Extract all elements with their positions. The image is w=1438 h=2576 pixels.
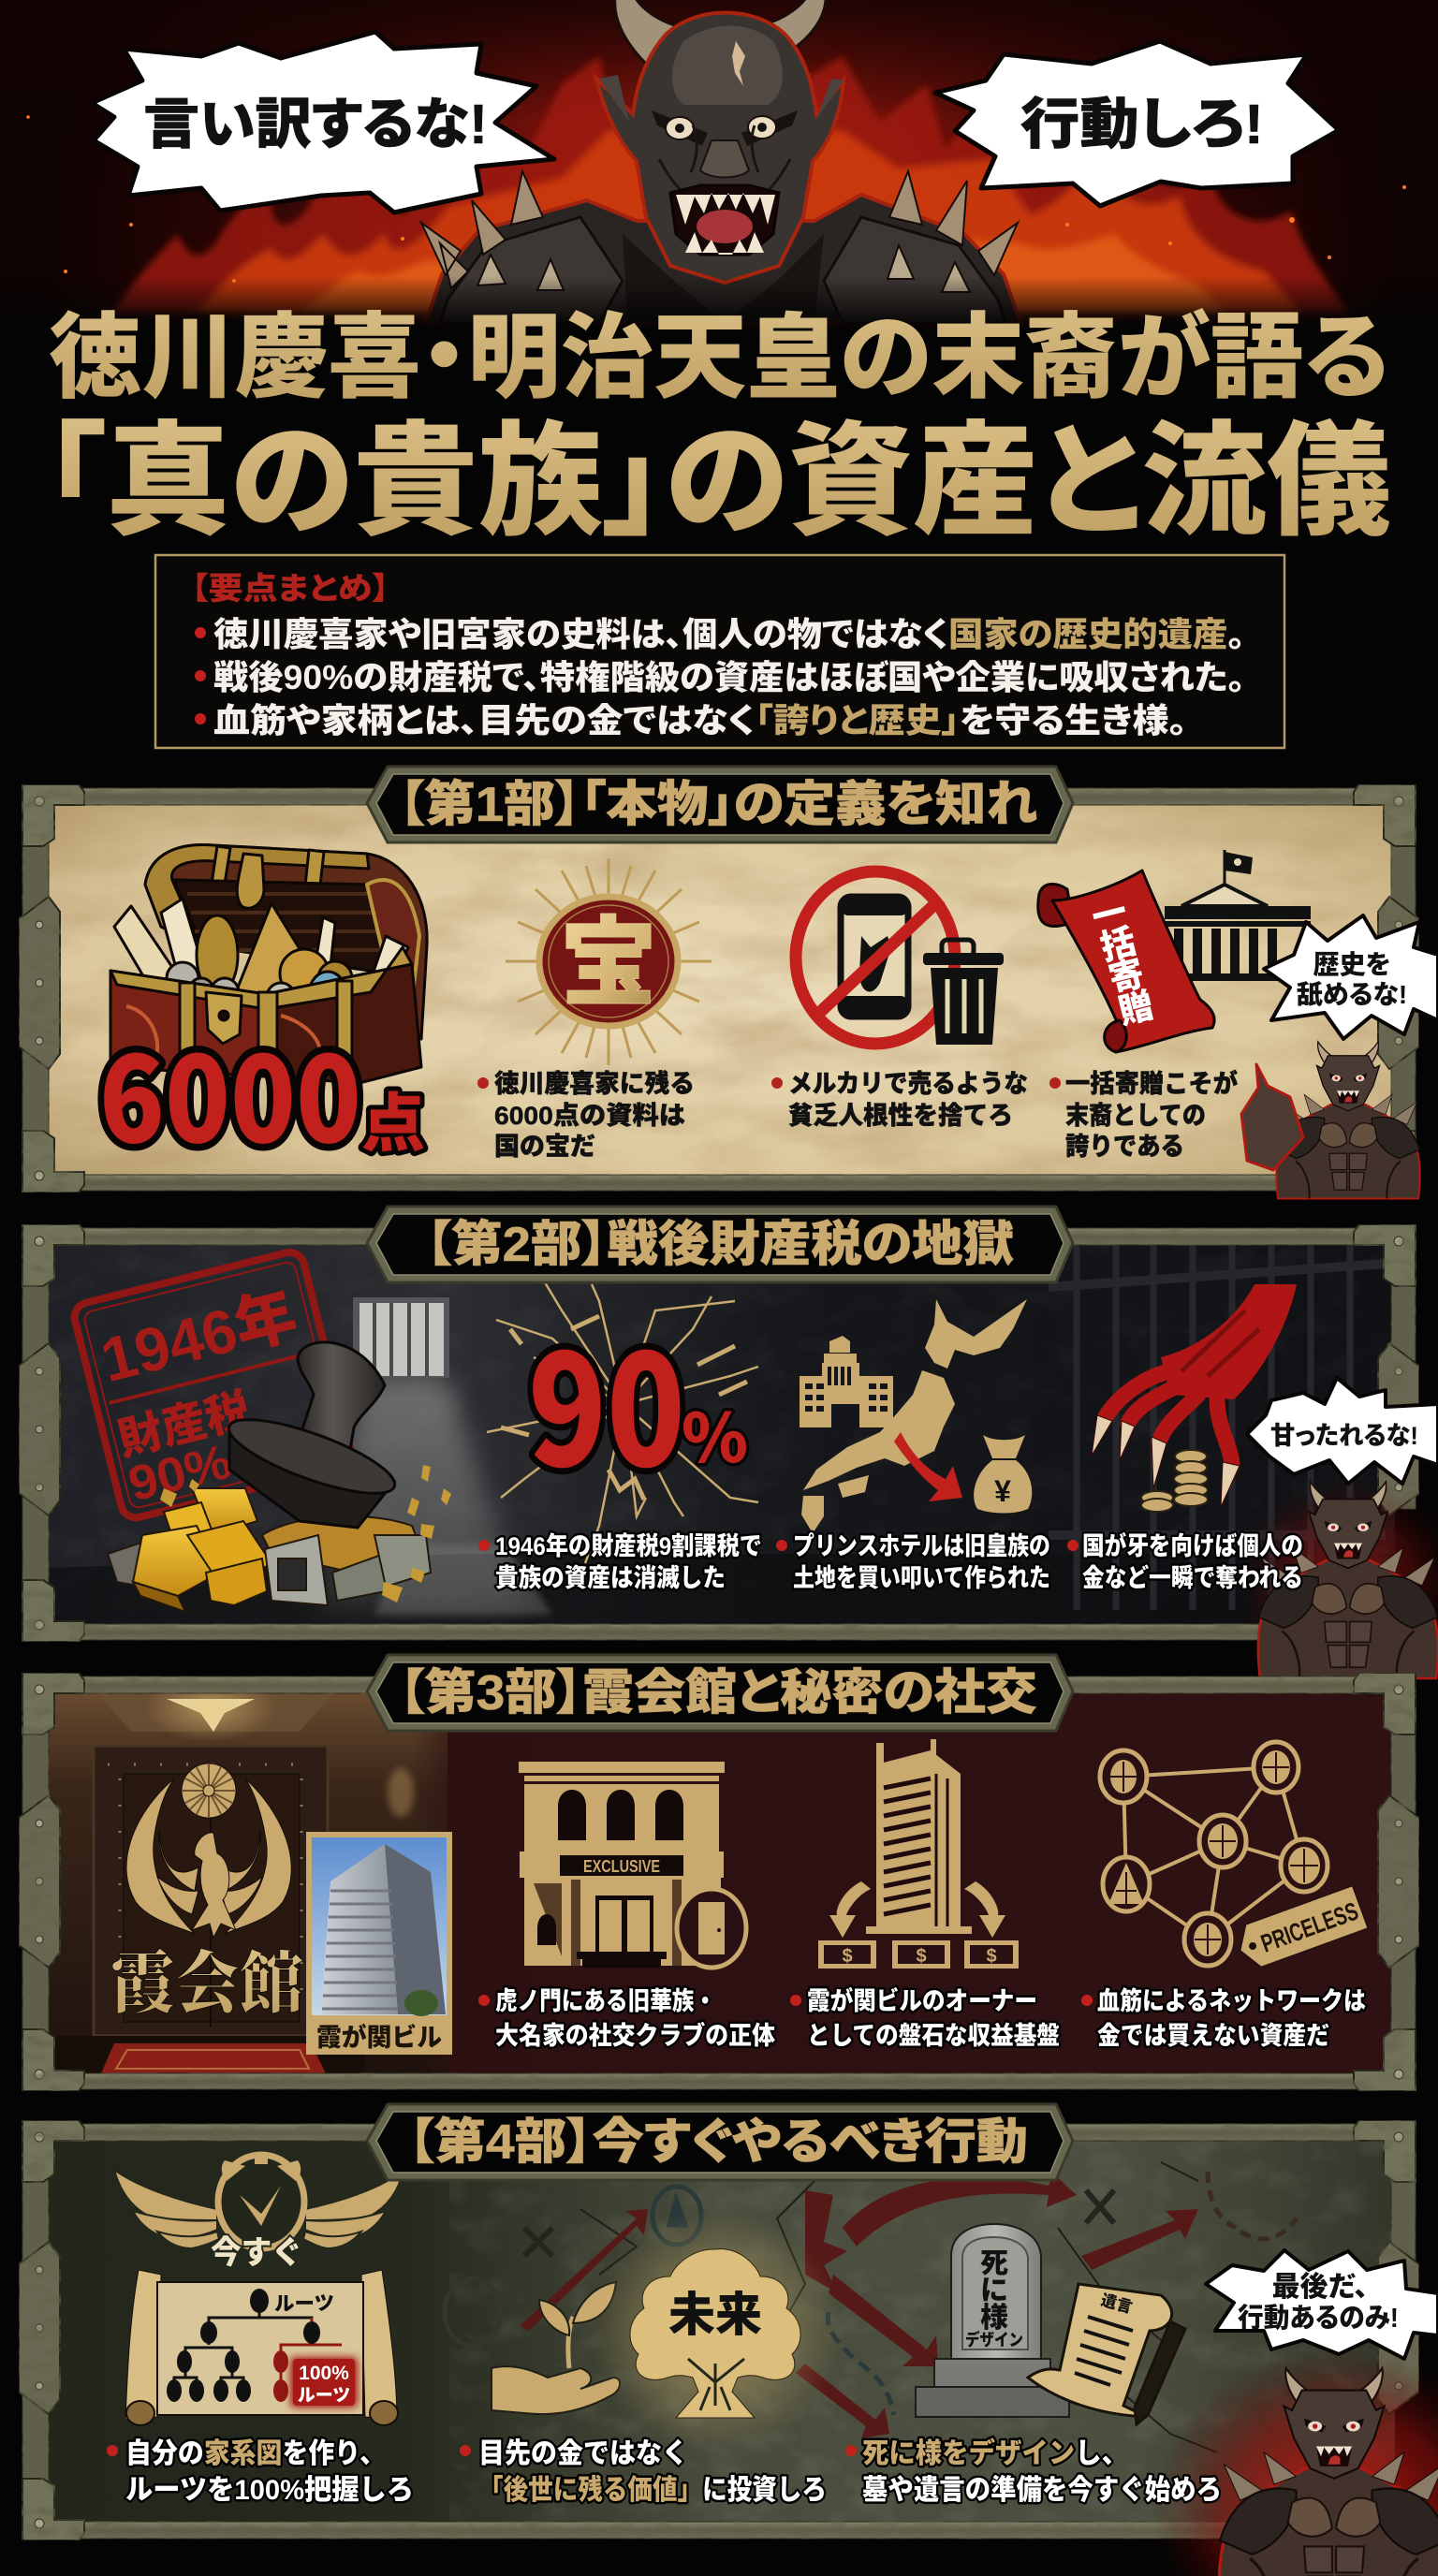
arrow: land to money: [894, 1432, 962, 1501]
maroon background: [45, 1690, 1395, 2075]
banner part 4: [367, 2104, 1073, 2180]
speech bubble right: 行動しろ!: [935, 41, 1339, 206]
wings: [114, 2170, 404, 2248]
icon: treasure medallion: [506, 858, 712, 1065]
prohibition sign: [796, 871, 955, 1044]
family tree: [167, 2289, 342, 2402]
panel: part 1: [19, 767, 1438, 1198]
tax stamp mark: 90%: [124, 1434, 236, 1512]
icon: red scroll 一括寄贈: 寄: [1105, 954, 1148, 1000]
icon: gravestone: デザイン: [965, 2330, 1023, 2349]
caption 1: 6000点の資料は: [494, 1102, 685, 1130]
speech bubble: 歴史を舐めるな: [1264, 915, 1438, 1039]
icon: will document: 遺言: [1099, 2291, 1135, 2317]
oni armor and shoulders: [421, 171, 1020, 323]
title: 徳川慶喜・明治天皇の末裔が語る: [49, 305, 1389, 409]
caption 3: [845, 2437, 1222, 2506]
prison background: [45, 1241, 1395, 1627]
photo: Kasumigaseki Building: [306, 1832, 452, 2055]
banner part 4: 【第4部】今すぐやるべき行動: [408, 2115, 1028, 2170]
speech bubble: 甘ったれるな: 甘ったれるな!: [1270, 1422, 1418, 1450]
caption 3: [1067, 1531, 1303, 1592]
oni mini part 4: [1152, 2349, 1438, 2576]
icon: office tower: $: [916, 1946, 927, 1967]
6000点: 6000: [99, 1006, 361, 1177]
icon: state building: [1165, 850, 1311, 981]
photo: Kasumigaseki Building: 霞が関ビル: [316, 2023, 442, 2052]
olive map background: [45, 2137, 1395, 2525]
icon: hotel building: [800, 1336, 893, 1427]
caption 3: 墓や遺言の準備を今すぐ始めろ: [862, 2475, 1222, 2506]
icon: exclusive club: [519, 1762, 746, 1968]
icon: will document: [1028, 2284, 1185, 2424]
banner part 1: 【第1部】「本物」の定義を知れ: [399, 778, 1037, 832]
door hall: [45, 1675, 477, 2075]
caption 3: 死に様をデザインし、: [862, 2437, 1128, 2469]
banner part 3: 【第3部】霞会館と秘密の社交: [399, 1666, 1037, 1720]
speech bubble left: 言い訳するな!: 言い訳するな!: [143, 94, 488, 155]
speech bubble: 行動あるのみ: 最後だ、: [1272, 2272, 1368, 2303]
speech bubble: 行動あるのみ: [1206, 2250, 1438, 2359]
jail bars: [1049, 1245, 1386, 1610]
fade to black under the title: [0, 276, 1438, 328]
speech bubble: 行動あるのみ: 行動あるのみ!: [1238, 2303, 1399, 2334]
caption 1: [478, 1987, 775, 2050]
100% roots badge: 100%: [299, 2363, 349, 2384]
stone frame: [19, 1673, 1419, 2091]
chest treasures: [114, 899, 408, 1017]
big 90 percent with cracks: 90: [528, 1289, 685, 1511]
trash can: [923, 940, 1004, 1045]
100% roots badge: ルーツ: [298, 2386, 350, 2406]
summary line 3: 血筋や家柄とは、目先の金ではなく 「誇りと歴史」 を守る生き様。: [213, 701, 1187, 739]
stone frame: [19, 784, 1419, 1193]
caption 3: 誇りである: [1065, 1133, 1184, 1161]
oni mini part 1: [1241, 1042, 1420, 1198]
tax stamp mark: [71, 1250, 354, 1521]
icon: family crest network: [1100, 1742, 1328, 1966]
stone frame: [19, 2120, 1419, 2540]
caption 3: [1049, 1069, 1238, 1161]
panel: part 3: [19, 1655, 1419, 2091]
icon: exclusive club: EXCLUSIVE: [583, 1857, 660, 1876]
caption 2: [460, 2438, 827, 2506]
icon: gravestone: に: [980, 2276, 1008, 2306]
caption 2: [776, 1532, 1050, 1592]
caption 2: メルカリで売るような: [788, 1070, 1028, 1098]
summary bullets: [195, 627, 206, 724]
pointing arm: [1241, 1064, 1303, 1170]
speech bubble: 甘ったれるな: [1247, 1378, 1438, 1484]
panel: part 2: [19, 1207, 1438, 1685]
oni head: [596, 13, 844, 283]
caption 1: 大名家の社交クラブの正体: [495, 2021, 775, 2050]
icon: family tree scroll: [125, 2270, 398, 2425]
icon: golden tree 未来: 未来: [668, 2289, 762, 2341]
title: [43, 305, 1391, 550]
icon: golden tree 未来: [589, 2209, 842, 2452]
red route arrows: [520, 2174, 1198, 2438]
stamp hammer: [221, 1342, 403, 1528]
icon: money bag: ¥: [994, 1474, 1011, 1508]
caption 1: [478, 1532, 762, 1592]
parchment background: [45, 801, 1395, 1178]
icon: winged clock 今すぐ: [114, 2155, 404, 2271]
caption 3: 金など一瞬で奪われる: [1082, 1564, 1303, 1592]
caption 1: 徳川慶喜家に残る: [494, 1069, 695, 1098]
icon: office tower: [818, 1739, 1019, 1969]
summary line 1: 徳川慶喜家や旧宮家の史料は、個人の物ではなく 国家の歴史的遺産 。: [213, 615, 1245, 653]
banner part 2: 【第2部】戦後財産税の地獄: [426, 1218, 1014, 1272]
icon: map of Japan: [801, 1299, 1027, 1533]
caption 1: 虎ノ門にある旧華族・: [495, 1987, 716, 2015]
emblem: chrysanthemum and phoenix: [126, 1764, 291, 1938]
speech bubble left: 言い訳するな!: [92, 32, 554, 212]
speech bubble: 歴史を舐めるな: 舐めるな!: [1297, 980, 1407, 1009]
family tree: ルーツ: [274, 2293, 334, 2315]
tax stamp mark: 財産税: [112, 1385, 256, 1466]
caption 2: 土地を買い叩いて作られた: [793, 1564, 1050, 1592]
caption 1: [477, 1069, 695, 1161]
icon: red scroll 一括寄贈: 括: [1096, 922, 1139, 968]
embers: [26, 115, 1406, 283]
caption 2: 目先の金ではなく: [478, 2438, 688, 2469]
caption 2: 「後世に残る価値」に投資しろ: [478, 2474, 827, 2506]
caption 1: ルーツを100%把握しろ: [125, 2475, 414, 2506]
tag: PRICELESS: PRICELESS: [1257, 1896, 1362, 1958]
icon: red scroll 一括寄贈: [1038, 871, 1214, 1052]
caption 1: 国の宝だ: [494, 1133, 595, 1161]
banner part 3: [367, 1655, 1073, 1731]
speech bubble right: 行動しろ!: 行動しろ!: [1020, 94, 1264, 155]
caption 3: 金では買えない資産だ: [1097, 2022, 1329, 2050]
caption 1: 自分の家系図を作り、: [125, 2438, 386, 2469]
icon: treasure chest: [110, 845, 427, 1083]
summary heading: 【要点まとめ】: [191, 571, 389, 606]
hero: fire background and oni: [0, 0, 1438, 458]
gold and rubble pile: [108, 1488, 431, 1612]
icon: office tower: $: [986, 1946, 997, 1967]
banner part 2: [367, 1207, 1073, 1282]
caption 2: としての盤石な収益基盤: [807, 2022, 1060, 2050]
oni mini part 2: [1236, 1479, 1438, 1685]
icon: winged clock 今すぐ: 今すぐ: [211, 2235, 302, 2271]
icon: coin stack: [1141, 1450, 1208, 1512]
caption 3: [1081, 1986, 1366, 2050]
tax stamp mark: 1946年: [95, 1280, 303, 1395]
summary line 2: 戦後90%の財産税で、特権階級の資産はほぼ国や企業に吸収された。: [213, 658, 1245, 696]
icon: gravestone: [916, 2224, 1069, 2417]
fire sky: [0, 0, 1438, 328]
oni horns: [615, 0, 826, 64]
title: 「真の貴族」の資産と流儀: [43, 413, 1391, 550]
icon: treasure medallion: 宝: [560, 910, 657, 1018]
phone: [841, 897, 908, 1017]
caption 2: 貧乏人根性を捨てろ: [788, 1102, 1013, 1130]
icon: red claw: [1092, 1284, 1297, 1507]
prison window: [353, 1297, 449, 1378]
map marks: [445, 2172, 1297, 2415]
oni mouth: [670, 185, 779, 255]
caption 3: 血筋によるネットワークは: [1097, 1986, 1366, 2015]
caption 3: 国が牙を向けば個人の: [1082, 1531, 1303, 1560]
caption 2: [790, 1986, 1060, 2050]
6000点: 点: [361, 1089, 425, 1160]
tag: PRICELESS: [1233, 1886, 1368, 1971]
stone frame: [19, 1224, 1419, 1642]
caption 2: 霞が関ビルのオーナー: [807, 1986, 1037, 2015]
caption 1: 貴族の資産は消滅した: [495, 1564, 726, 1592]
big 90 percent with cracks: [487, 1282, 758, 1563]
caption 3: 末裔としての: [1065, 1102, 1206, 1130]
speech bubble: 歴史を舐めるな: 歴史を: [1313, 950, 1390, 979]
caption 2: プリンスホテルは旧皇族の: [793, 1532, 1050, 1560]
icon: hand with sprout: [492, 2282, 620, 2414]
icon: red scroll 一括寄贈: 贈: [1114, 986, 1157, 1032]
caption 2: [771, 1070, 1028, 1130]
summary box: [155, 555, 1284, 748]
icon: money bag: [974, 1435, 1032, 1513]
icon: gravestone: 死: [980, 2248, 1008, 2279]
banner part 1: [367, 767, 1073, 842]
big 90 percent with cracks: %: [682, 1383, 748, 1482]
霞会館: 霞会館: [110, 1947, 303, 2022]
icon: office tower: $: [842, 1946, 853, 1967]
icon: red scroll 一括寄贈: 一: [1088, 892, 1131, 937]
caption 3: 一括寄贈こそが: [1065, 1069, 1238, 1098]
caption 1: 1946年の財産税9割課税で: [495, 1532, 762, 1560]
panel: part 4: [19, 2104, 1438, 2576]
debris: [160, 1465, 451, 1603]
icon: no phone with trash: [796, 871, 1004, 1045]
100% roots badge: [290, 2357, 358, 2408]
icon: gravestone: 様: [980, 2303, 1008, 2334]
caption 1: [107, 2438, 414, 2506]
